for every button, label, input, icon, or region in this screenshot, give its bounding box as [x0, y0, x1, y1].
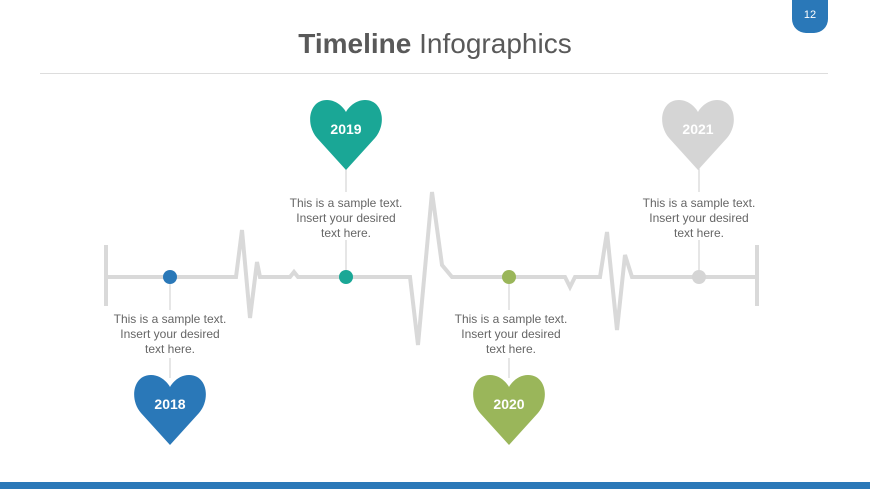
heart 2020: [473, 375, 545, 445]
heart 2018: 2018: [154, 396, 186, 412]
heart 2021: [662, 100, 734, 170]
dots: [163, 270, 706, 284]
text 2020: [454, 312, 567, 356]
text 2018: This is a sample text.: [114, 312, 226, 326]
text 2019: This is a sample text.: [290, 196, 402, 210]
heart 2021: 2021: [682, 121, 714, 137]
text 2021: Insert your desired: [649, 211, 749, 225]
text 2018: [114, 312, 226, 356]
heart 2019: [310, 100, 382, 170]
text 2021: [642, 196, 755, 240]
bottom bar: [0, 482, 870, 489]
text 2018: Insert your desired: [120, 327, 220, 341]
text 2019: Insert your desired: [296, 211, 396, 225]
title: Timeline Infographics: [298, 28, 572, 59]
text 2019: text here.: [321, 226, 371, 240]
page number badge: [792, 0, 828, 33]
heart 2018: [134, 375, 206, 445]
page number badge: 12: [804, 9, 816, 21]
text 2018: text here.: [145, 342, 195, 356]
heart 2020: 2020: [493, 396, 525, 412]
heartbeat line: [106, 192, 757, 345]
text 2021: text here.: [674, 226, 724, 240]
heart 2019: 2019: [330, 121, 362, 137]
text 2021: This is a sample text.: [643, 196, 755, 210]
text 2019: [290, 196, 402, 240]
text 2020: Insert your desired: [461, 327, 561, 341]
text 2020: This is a sample text.: [455, 312, 567, 326]
text 2020: text here.: [486, 342, 536, 356]
